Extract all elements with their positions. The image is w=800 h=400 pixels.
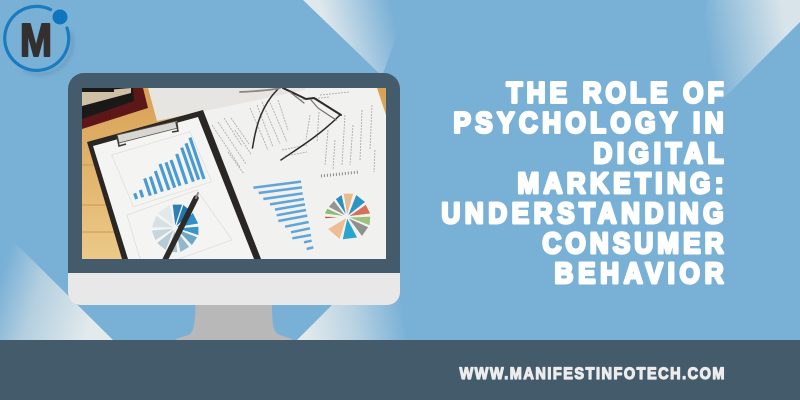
logo shadow bbox=[24, 32, 72, 74]
document text rows bbox=[212, 92, 375, 174]
title: DIGITAL bbox=[594, 137, 724, 169]
logo letter: M bbox=[20, 14, 52, 66]
logo bbox=[5, 6, 72, 74]
monitor bbox=[68, 73, 400, 340]
laptop bbox=[148, 88, 305, 121]
title: UNDERSTANDING bbox=[442, 197, 724, 229]
screen photo bbox=[82, 88, 386, 262]
pie chart: blue tones bbox=[151, 204, 199, 253]
title: MARKETING: bbox=[518, 167, 724, 199]
title: PSYCHOLOGY IN bbox=[454, 106, 724, 139]
footer band bbox=[0, 340, 800, 400]
title: BEHAVIOR bbox=[554, 257, 724, 289]
logo dot bbox=[52, 10, 68, 24]
horizontal bar chart bbox=[253, 182, 313, 249]
monitor bezel bbox=[68, 73, 400, 273]
clipboard paper bbox=[93, 117, 254, 259]
notebooks bbox=[82, 88, 148, 129]
light beam: bottom right bbox=[297, 292, 412, 340]
light beam: bottom left bbox=[0, 228, 113, 340]
title bbox=[442, 76, 724, 289]
wood plank seams bbox=[82, 164, 114, 232]
logo ring bbox=[5, 6, 69, 70]
clipboard bbox=[87, 110, 261, 259]
legend ticks bbox=[321, 172, 359, 176]
large paper sheet bbox=[204, 88, 386, 259]
monitor chin bbox=[68, 270, 400, 305]
light beam: top right bbox=[690, 0, 800, 100]
lower chart sheet outline bbox=[127, 190, 232, 262]
monitor stand bbox=[176, 305, 292, 340]
light beam: top left bbox=[303, 0, 410, 76]
glasses bbox=[240, 88, 341, 160]
website url: WWW.MANIFESTINFOTECH.COM bbox=[460, 365, 724, 383]
title: CONSUMER bbox=[542, 227, 724, 259]
bar chart bbox=[112, 132, 212, 207]
clipboard clip bbox=[117, 121, 178, 146]
pie chart: multicolour bbox=[324, 193, 371, 240]
wooden desk bbox=[82, 88, 386, 259]
title: THE ROLE OF bbox=[506, 76, 724, 109]
pen bbox=[164, 193, 198, 262]
